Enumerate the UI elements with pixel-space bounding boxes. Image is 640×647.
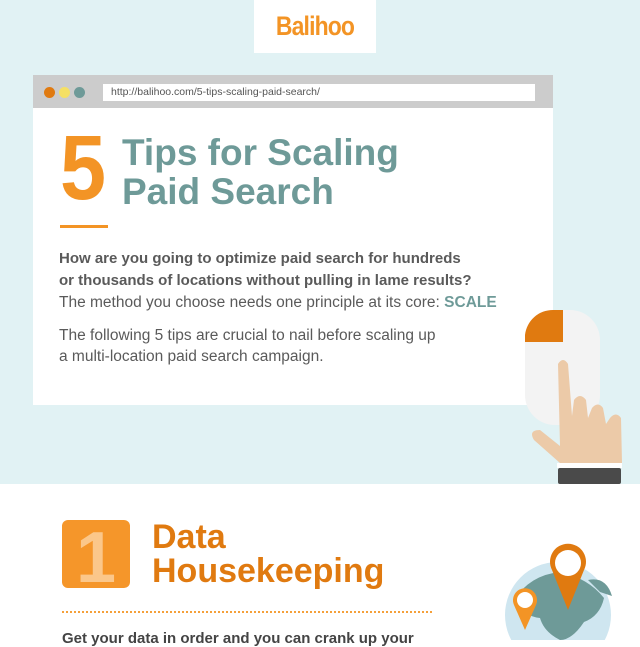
orange underline: [60, 225, 108, 228]
logo box: [254, 0, 376, 53]
big number 5: 5: [60, 117, 106, 219]
intro text: or thousands of locations without pulling in lame results?: [59, 272, 472, 289]
logo text: Balihoo: [276, 11, 354, 41]
section 1 heading: Data: [152, 518, 226, 556]
browser toolbar: [33, 75, 553, 108]
browser window: [33, 75, 553, 405]
title: Tips for Scaling: [122, 132, 399, 173]
title: Paid Search: [122, 171, 334, 212]
top background: [0, 0, 640, 484]
icon: globe with pins: [505, 544, 612, 640]
section 1 heading: [152, 518, 384, 590]
section 1 text: Get your data in order and you can crank up your: [62, 630, 414, 647]
intro text: a multi-location paid search campaign.: [59, 348, 324, 365]
intro text: How are you going to optimize paid search for hundreds: [59, 250, 461, 267]
section 1 heading: Housekeeping: [152, 552, 384, 590]
section 1 number badge: [62, 520, 130, 588]
url field: [103, 84, 535, 101]
dotted divider: [62, 611, 432, 613]
intro text: The method you choose needs one principle at its core: SCALE: [59, 294, 497, 311]
url field: http://balihoo.com/5-tips-scaling-paid-search/: [111, 86, 320, 98]
window dots: [44, 87, 55, 98]
title: [122, 132, 399, 212]
intro text: [59, 250, 497, 365]
intro text: The following 5 tips are crucial to nail before scaling up: [59, 327, 436, 344]
icon: mouse with hand: [525, 310, 622, 484]
